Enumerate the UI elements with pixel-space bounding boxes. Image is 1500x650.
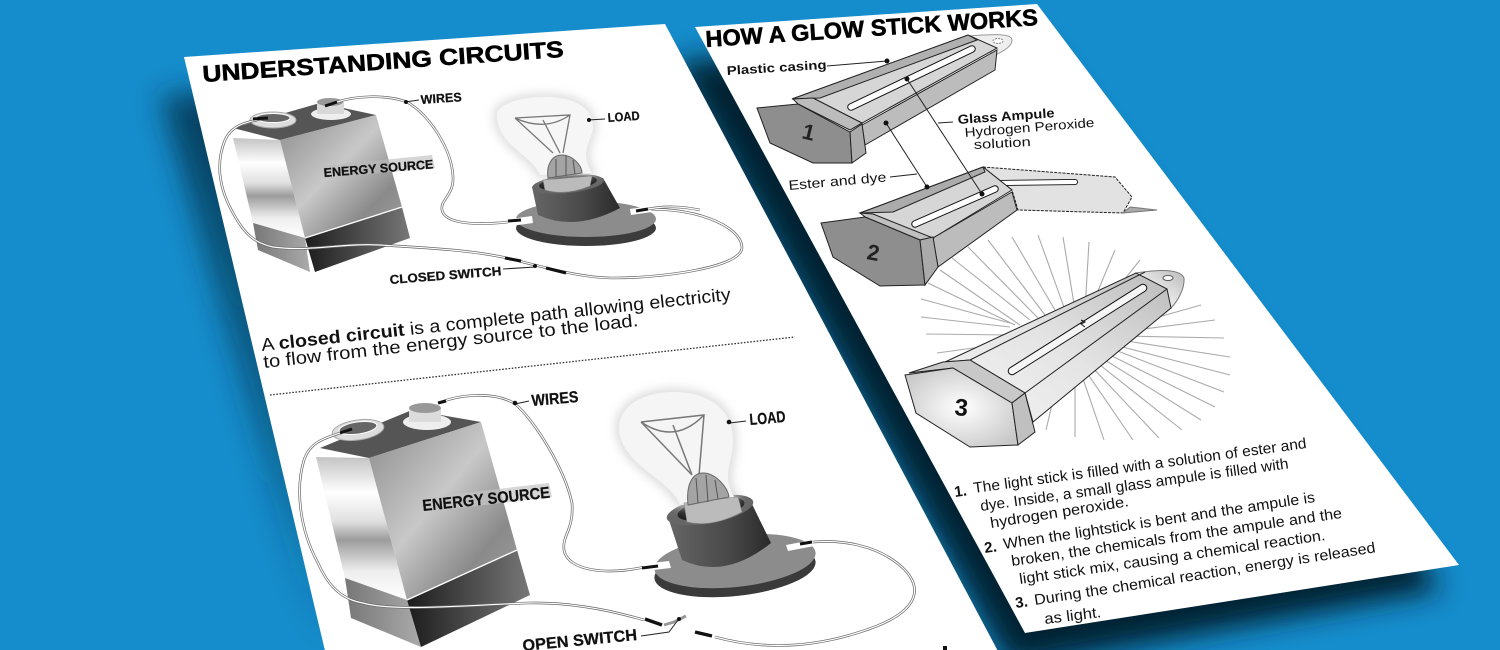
glow rays	[921, 235, 1230, 440]
label: open switch	[522, 620, 678, 650]
wire: load to battery	[337, 97, 508, 224]
step 2: 2.	[983, 538, 998, 557]
label: wires: WIRES	[420, 90, 462, 107]
stick 3	[905, 271, 1184, 447]
label: energy source: ENERGY SOURCE	[422, 485, 551, 515]
number 1: 1	[800, 119, 818, 146]
step 3	[1014, 539, 1377, 628]
step 1	[953, 435, 1308, 532]
stick 2	[821, 167, 1157, 286]
panel: understanding circuits	[184, 24, 1000, 650]
step 3: During the chemical reaction, energy is released	[1033, 539, 1377, 609]
label: load: LOAD	[607, 109, 640, 125]
step 2: broken, the chemicals from the ampule and the	[1010, 505, 1343, 570]
text: closed circuit description: to flow from the energy source to the load.	[262, 310, 639, 372]
wire ends	[253, 102, 337, 119]
battery top	[233, 98, 376, 140]
light bulb	[497, 97, 593, 192]
label: glass ampule	[957, 105, 1095, 152]
battery sides	[233, 115, 410, 272]
battery top	[320, 403, 481, 458]
label: wires	[513, 389, 579, 410]
label: glass ampule: Glass Ampule	[957, 105, 1055, 127]
label: plastic casing: Plastic casing	[726, 58, 827, 78]
lamp base	[642, 489, 818, 604]
label: closed switch: CLOSED SWITCH	[389, 264, 502, 287]
leader lines	[827, 61, 982, 194]
title: how a glow stick works: HOW A GLOW STICK WORKS	[705, 4, 1039, 52]
step 1: 1.	[953, 482, 968, 501]
label: glass ampule: Hydrogen Peroxide	[964, 115, 1095, 140]
label: load: LOAD	[749, 409, 786, 429]
wire: battery to switch	[300, 433, 644, 620]
text: closed circuit description: A closed circuit is a complete path allowing electricity	[260, 284, 732, 355]
step 2	[983, 489, 1343, 588]
number 3: 3	[953, 394, 969, 422]
leader dots	[884, 58, 984, 196]
step 3: as light.	[1043, 604, 1102, 628]
step 1: dye. Inside, a small glass ampule is filled with	[979, 455, 1290, 515]
wire ends	[340, 401, 446, 433]
number 2: 2	[865, 239, 882, 266]
label: closed switch	[389, 264, 537, 287]
step 1: hydrogen peroxide.	[989, 493, 1130, 532]
text: steps	[953, 435, 1377, 628]
battery sides	[316, 422, 530, 647]
bottom clipped text	[943, 646, 947, 650]
stick 1	[757, 35, 1012, 163]
label: load	[587, 109, 640, 125]
shadow: left page	[160, 80, 620, 650]
label: energy source: ENERGY SOURCE	[323, 157, 434, 180]
step 1: The light stick is filled with a solution of ester and	[972, 435, 1308, 497]
label: glass ampule: solution	[973, 134, 1031, 152]
open switch	[645, 616, 712, 636]
light bulb	[619, 392, 742, 524]
step 2: When the lightstick is bent and the ampule is	[1002, 489, 1316, 553]
step 2: light stick mix, causing a chemical reaction.	[1018, 527, 1326, 588]
illustration: closed circuit	[220, 97, 742, 278]
wire: load to battery	[439, 395, 644, 571]
label: wires: WIRES	[531, 389, 579, 410]
illustration: open circuit	[300, 392, 915, 647]
shadow: right page	[672, 36, 1442, 650]
step 3: 3.	[1014, 593, 1029, 612]
wire: switch to load	[715, 541, 915, 645]
label: ester and dye: Ester and dye	[788, 170, 887, 193]
wire: battery through switch	[220, 118, 742, 278]
title: understanding circuits: UNDERSTANDING CIRCUITS	[202, 36, 564, 87]
panel: how a glow stick works	[695, 4, 1459, 633]
label: load	[727, 409, 786, 429]
lamp base	[508, 171, 700, 246]
closed switch contacts	[505, 258, 566, 273]
